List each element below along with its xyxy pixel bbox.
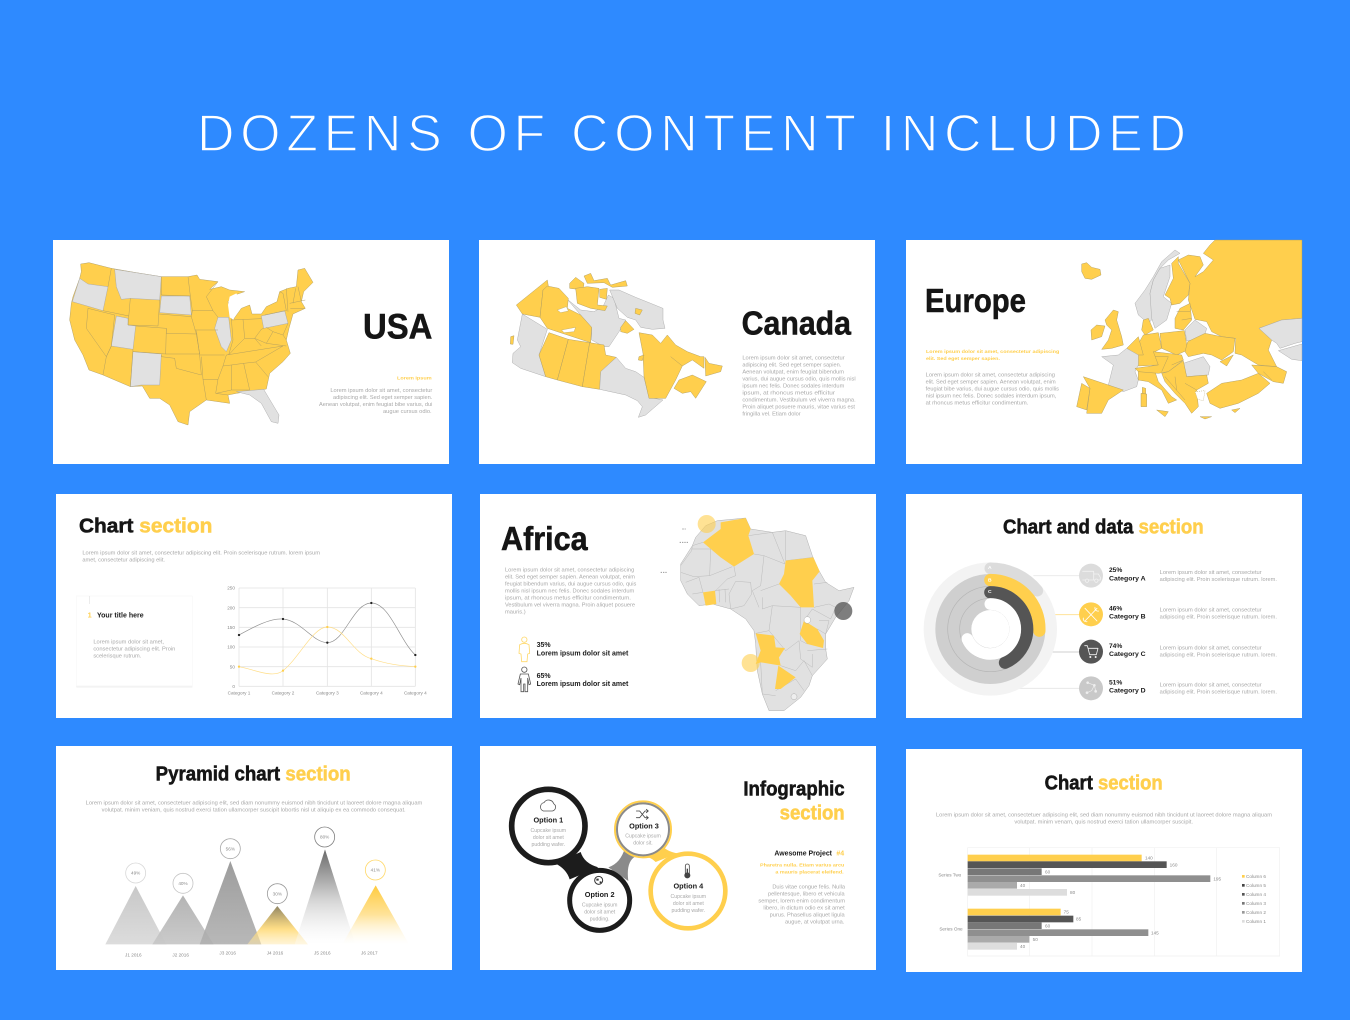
text block: feugiat bibe varius, dui augue cursus odio, quis mollis [926, 386, 1059, 392]
option 2: pudding. [590, 916, 610, 922]
map: Africa [661, 518, 854, 711]
text block [86, 800, 422, 813]
card: your title here [76, 596, 192, 688]
axis labels: J3 2016 [219, 950, 236, 955]
text block: at rhoncus metus efficitur condimentum. [926, 400, 1028, 406]
option 3 [625, 809, 661, 846]
stat: 35% [537, 642, 629, 657]
heading: Chart section: Chart section [79, 515, 212, 538]
badge values: 56% [226, 846, 235, 851]
badge values: 30% [273, 891, 282, 896]
horizontal bar chart: 75 [1064, 910, 1069, 915]
pyramid chart [105, 849, 409, 944]
text block: awesome project: Duis vitae congue felis. Nulla [772, 885, 845, 891]
text block: adipiscing elit. Sed eget semper sapien. [742, 362, 841, 368]
heading: Chart and data section: Chart and data section [1003, 516, 1204, 538]
descriptions: Lorem ipsum dolor sit amet, consectetur [1160, 645, 1262, 651]
radial bar chart: A [988, 565, 992, 571]
category labels: 25% [1109, 567, 1122, 574]
panel: bar chart slide [906, 749, 1302, 972]
card: your title here: Your title here [97, 610, 144, 619]
marker: north-west circle [698, 515, 716, 533]
text block [319, 375, 433, 415]
title: DOZENS OF CONTENT INCLUDED [197, 105, 1186, 163]
text block: awesome project: semper, lorem enim condimentum [758, 899, 845, 905]
horizontal bar chart: 80 [1070, 890, 1076, 895]
icon: shopping cart [1079, 640, 1103, 664]
line chart: Category 4 [360, 690, 383, 695]
text block: Proin aliquet posuere mauris, vitae varius est [742, 404, 856, 410]
text block: awesome project: Awesome Project [774, 850, 833, 857]
descriptions [1160, 570, 1277, 695]
descriptions: adipiscing elit. Proin scelerisque rutrum. lorem. [1160, 689, 1277, 695]
descriptions: adipiscing elit. Proin scelerisque rutrum. lorem. [1160, 615, 1277, 621]
text block: ipsum nec felis. Donec sodales interdum [742, 383, 844, 389]
connector lines [990, 576, 1079, 688]
badge values: 49% [131, 871, 140, 876]
line chart: Category 2 [272, 690, 295, 695]
axis labels [125, 950, 378, 958]
option 1: Cupcake ipsum [531, 828, 566, 834]
badge values: 40% [178, 881, 188, 886]
card: your title here: Lorem ipsum dolor sit amet, [93, 639, 164, 645]
stat: 35%: 35% [537, 642, 551, 649]
option 1 [531, 800, 566, 848]
horizontal bar chart: 140 [1145, 855, 1153, 860]
category labels: Category C [1109, 651, 1146, 658]
text block [82, 551, 320, 564]
text block: Aenean volutpat, enim feugiat bibendum [742, 369, 844, 375]
text block: amet, consectetur adipiscing elit. [82, 558, 165, 564]
category labels: 51% [1109, 680, 1122, 687]
line chart: 250 [227, 586, 235, 591]
text block: augue cursus odio. [383, 409, 432, 415]
option 3: Option 3 [629, 821, 659, 830]
text block: feugiat bibendum varius, dui augue cursus odio, quis [505, 581, 637, 587]
horizontal bar chart: 40 [1020, 944, 1026, 949]
option 2: dolor sit amet [584, 909, 616, 915]
panel: radial chart and data slide [906, 494, 1302, 718]
text block: awesome project: #4 [836, 850, 844, 857]
text block: adipiscing elit. Sed eget semper sapien. [333, 395, 432, 401]
text block: Lorem ipsum dolor sit amet, consectetur [330, 388, 433, 394]
text block: Vestibulum vel viverra magna. Proin aliquet posuere [505, 602, 635, 608]
panel: USA map slide [53, 240, 449, 464]
horizontal bar chart: Series One [939, 927, 963, 932]
text block: volutpat. minim venam, quis nostrud exerci tation ullamcorper suscipit. [1014, 820, 1193, 826]
text block: condimentum. Vestibulum vel viverra magna. [742, 397, 856, 403]
marker: south-west circle [742, 654, 760, 672]
text block [936, 813, 1272, 826]
heading: Infographic section [743, 779, 845, 825]
icon: yellow person [519, 637, 530, 662]
panel: infographic slide [480, 746, 876, 970]
stat: 65%: Lorem ipsum dolor sit amet [537, 681, 629, 688]
text block: Lorem ipsum [397, 375, 432, 381]
horizontal bar chart [938, 848, 1280, 956]
legend: Column 2 [1246, 910, 1266, 915]
option 4: Cupcake ipsum [671, 894, 706, 900]
descriptions: Lorem ipsum dolor sit amet, consectetur [1160, 682, 1262, 688]
option 4: Option 4 [673, 882, 704, 891]
horizontal bar chart: 60 [1045, 869, 1051, 874]
category labels: Category D [1109, 688, 1146, 695]
heading: Europe: Europe [925, 283, 1026, 320]
panel: Canada map slide [479, 240, 875, 464]
descriptions: Lorem ipsum dolor sit amet, consectetur [1160, 570, 1262, 576]
badge values: 80% [320, 835, 329, 840]
horizontal bar chart: 60 [1045, 923, 1051, 928]
stat: 35%: Lorem ipsum dolor sit amet [537, 650, 629, 657]
line chart: Category 3 [316, 690, 339, 695]
text block: Lorem ipsum dolor sit amet, consectetur adipiscing elit. Proin scelerisque rutrum. lorem ipsum [82, 551, 320, 557]
legend: Column 1 [1246, 919, 1266, 924]
category labels [1109, 567, 1146, 695]
heading: Africa: Africa [501, 521, 588, 558]
horizontal bar chart: 50 [1033, 937, 1038, 942]
text block: Lorem ipsum dolor sit amet, consectetuer adipiscing elit, sed diam nonummy euismod nibh tincidunt ut laoreet dolore magna aliquam [936, 813, 1272, 819]
text block: mauris.) [505, 609, 526, 615]
option 3: dolor sit. [633, 840, 653, 846]
icon: dark person [518, 667, 531, 692]
legend: Column 5 [1246, 883, 1266, 888]
text block: awesome project: pellentesque, libero et vehicula [768, 892, 845, 898]
heading: Pyramid chart section: Pyramid chart section [156, 763, 351, 785]
marker: east circle [834, 602, 852, 620]
line chart: 200 [227, 605, 235, 610]
category labels: Category B [1109, 614, 1146, 621]
icon: truck [1079, 564, 1103, 588]
map: Canada [510, 273, 722, 417]
card: your title here: 1 [88, 610, 92, 619]
axis labels: J4 2016 [267, 950, 284, 955]
text block: nisl ipsum nec felis. Donec sodales interdum ipsum, [926, 393, 1056, 399]
stat: 65%: 65% [537, 673, 551, 680]
text block: fringilla vel. Etiam dolor [742, 411, 801, 417]
option 2 [582, 876, 617, 922]
card: your title here: consectetur adipiscing elit. Proin [93, 646, 175, 652]
line chart: 150 [227, 625, 235, 630]
option 4: dolor sit amet [673, 901, 704, 907]
option 1: Option 1 [533, 816, 563, 825]
text block: volutpat. minim veniam, quis nostrud exerci tation ullamcorper suscipit lobortis nisl ut aliquip ex ea commodo consequat. [102, 807, 406, 813]
axis labels: J2 2016 [172, 953, 189, 958]
map: Europe [1077, 240, 1302, 419]
panel: pyramid chart slide [56, 746, 452, 970]
descriptions: adipiscing elit. Proin scelerisque rutrum. lorem. [1160, 652, 1277, 658]
heading: Canada: Canada [742, 306, 851, 343]
category labels: 74% [1109, 643, 1122, 650]
radial bar chart: B [988, 577, 992, 583]
panel: Europe map slide [906, 240, 1302, 464]
horizontal bar chart: 40 [1020, 883, 1026, 888]
radial bar chart [924, 562, 1057, 696]
text block: ipsum, at rhoncus metus efficitur condimentum. [505, 595, 631, 601]
option 2: Option 2 [585, 890, 615, 899]
axis labels: J1 2016 [125, 953, 142, 958]
text block: awesome project: augue, at volutpat urna. [785, 920, 844, 926]
line chart: Category 4 [404, 690, 427, 695]
text block: awesome project: libero, in dictum odio ex sit amet [763, 906, 845, 912]
text block: varius, dui augue cursus odio, quis mollis nisl [742, 376, 856, 382]
text block: Lorem ipsum dolor sit amet, consectetur [742, 355, 845, 361]
text block: Lorem ipsum dolor sit amet, consectetur adipiscing [505, 567, 634, 573]
text block [926, 349, 1059, 406]
heading: Infographic section: Infographic [743, 779, 845, 801]
stat: 65% [537, 673, 629, 688]
category labels: 46% [1109, 606, 1122, 613]
descriptions: Lorem ipsum dolor sit amet, consectetur [1160, 608, 1262, 614]
value badges [126, 827, 385, 904]
icon: tools [1079, 602, 1103, 626]
text block: ipsum, at rhoncus metus efficitur [742, 390, 835, 396]
badge values: 41% [371, 868, 380, 873]
text block: elit. Sed eget semper sapien. Aenean volutpat, enim [505, 574, 635, 580]
card: your title here: scelerisque rutrum. [93, 653, 141, 659]
text block: Lorem ipsum dolor sit amet, consectetur adipiscing [926, 349, 1059, 355]
horizontal bar chart: 160 [1170, 862, 1178, 867]
horizontal bar chart: 85 [1076, 917, 1082, 922]
legend: Column 4 [1246, 892, 1266, 897]
text block: awesome project: purus. Phasellus aliquet ligula [770, 913, 845, 919]
badge values [131, 835, 380, 896]
text block [505, 567, 637, 615]
map: USA [70, 263, 313, 425]
text block: elit. Sed eget semper sapien. Aenean volutpat, enim [926, 379, 1056, 385]
line chart: 0 [232, 684, 235, 689]
panel: Africa map slide [480, 494, 876, 718]
text block: mollis nisl ipsum nec felis. Donec sodales interdum [505, 588, 634, 594]
radial bar chart: C [988, 589, 992, 595]
descriptions: adipiscing elit. Proin scelerisque rutrum. lorem. [1160, 577, 1277, 583]
option 2: Cupcake ipsum [582, 902, 617, 908]
text block: awesome project [758, 850, 845, 926]
text block [742, 355, 856, 417]
legend: Column 6 [1246, 874, 1266, 879]
heading: Infographic section: section [780, 803, 845, 825]
text block: Lorem ipsum dolor sit amet, consectetuer adipiscing elit, sed diam nonummy euismod nibh tincidunt ut laoreet dolore magna aliquam [86, 800, 422, 806]
panel: line chart slide [56, 494, 452, 718]
option 4: pudding wafer. [672, 908, 705, 914]
heading: Chart section: Chart section [1045, 772, 1163, 794]
text block: Aenean volutpat, enim feugiat bibe varius, dui [319, 402, 432, 408]
horizontal bar chart: 195 [1213, 876, 1222, 881]
legend [1242, 874, 1266, 924]
horizontal bar chart: Series Two [938, 873, 962, 878]
line chart: 100 [227, 645, 235, 650]
text block: Lorem ipsum dolor sit amet, consectetur adipiscing [926, 372, 1055, 378]
horizontal bar chart: 145 [1151, 930, 1159, 935]
line chart: 50 [230, 664, 235, 669]
option 4 [671, 864, 706, 914]
line chart [227, 586, 427, 695]
axis labels: J6 2017 [361, 950, 378, 955]
line chart: Category 1 [228, 690, 251, 695]
option 1: dolor sit amet [533, 835, 564, 841]
connected circles diagram [512, 789, 725, 930]
option 1: pudding wafer. [532, 842, 565, 848]
text block: awesome project: a mauris placerat eleifend. [775, 870, 844, 876]
text block: awesome project: Pharetra nulla. Etiam varius arcu [760, 863, 844, 869]
option 3: Cupcake ipsum [625, 833, 661, 839]
legend: Column 3 [1246, 901, 1266, 906]
heading: USA: USA [363, 308, 432, 347]
icon: nodes [1079, 676, 1103, 700]
axis labels: J5 2016 [314, 950, 331, 955]
category labels: Category A [1109, 575, 1146, 582]
text block: elit. Sed eget semper sapien. [926, 356, 1001, 362]
